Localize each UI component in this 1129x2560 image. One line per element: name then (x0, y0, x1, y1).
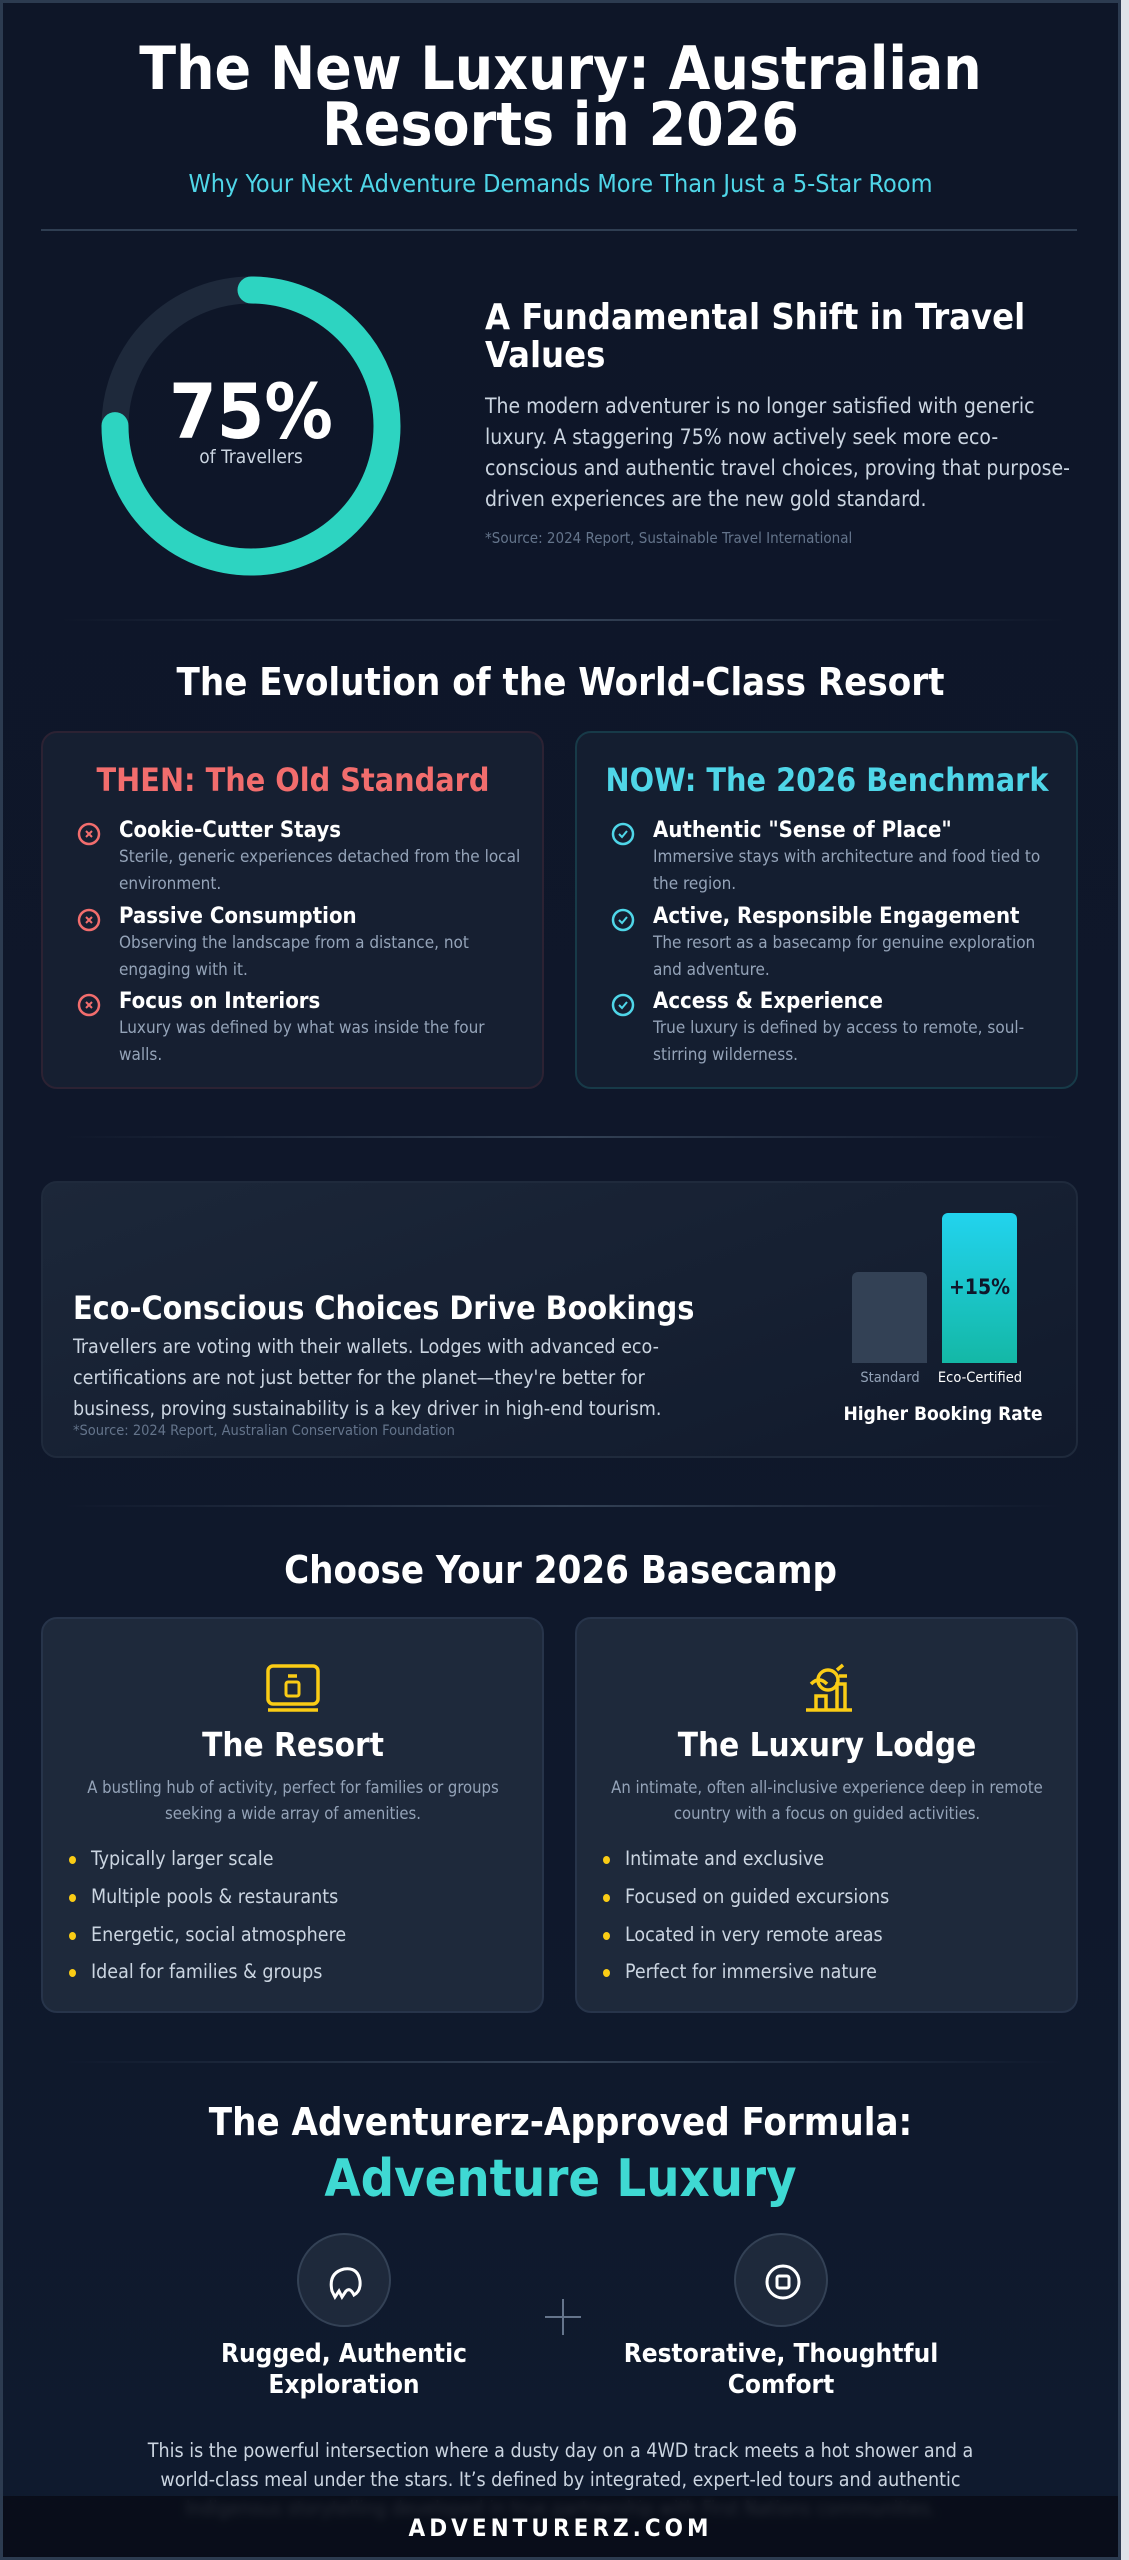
item: sense of place (612, 818, 1040, 894)
item: passive: Observing the landscape from a distance, not (119, 933, 469, 953)
subtitle: Why Your Next Adventure Demands More Than Just a 5-Star Room (188, 169, 932, 198)
panel: now: NOW: The 2026 Benchmark (606, 761, 1048, 799)
donut chart 75%: of Travellers (199, 446, 303, 468)
shift text block: luxury. A staggering 75% now actively seek more eco- (485, 425, 998, 449)
item: interiors (78, 989, 485, 1065)
list: resort features: Typically larger scale (91, 1847, 274, 1870)
icon: comfort (734, 2233, 828, 2327)
item: access: Access & Experience (653, 989, 883, 1014)
item: access (612, 989, 1024, 1065)
item: passive: Passive Consumption (119, 904, 357, 929)
eco paragraph (72, 1335, 661, 1420)
shift text block (484, 297, 1070, 547)
list: resort features: Energetic, social atmosphere (91, 1923, 346, 1946)
label: exploration (221, 2339, 467, 2400)
shift text block: conscious and authentic travel choices, proving that purpose- (485, 456, 1070, 480)
panel: eco bookings (41, 1181, 1078, 1458)
item: interiors: Luxury was defined by what was inside the four (119, 1018, 485, 1038)
item: sense of place: Authentic "Sense of Place" (653, 818, 952, 843)
heading: formula: The Adventurerz-Approved Formula: (209, 2100, 912, 2144)
item: interiors: walls. (119, 1045, 162, 1065)
panel: eco bookings: *Source: 2024 Report, Australian Conservation Foundation (73, 1423, 455, 1439)
panel: the resort: The Resort (202, 1725, 384, 1764)
panel: luxury lodge: The Luxury Lodge (678, 1725, 976, 1764)
item: cookie-cutter: Sterile, generic experiences detached from the local (119, 847, 520, 867)
item: access: stirring wilderness. (653, 1045, 798, 1065)
panel: now (575, 731, 1078, 1089)
item: interiors: Focus on Interiors (119, 989, 320, 1014)
list: lodge features: Focused on guided excursions (625, 1885, 889, 1908)
item: passive: engaging with it. (119, 960, 248, 980)
label: exploration: Exploration (268, 2370, 420, 2400)
bar chart: +15% (949, 1275, 1010, 1299)
heading: evolution: The Evolution of the World-Class Resort (177, 660, 944, 704)
closing paragraph (148, 2439, 973, 2520)
title: Resorts in 2026 (322, 90, 799, 160)
list: lodge features: Located in very remote areas (625, 1923, 883, 1946)
label: comfort: Comfort (728, 2370, 834, 2400)
item: cookie-cutter (78, 818, 520, 894)
list: resort features: Multiple pools & restaurants (91, 1885, 338, 1908)
footer (3, 2496, 1118, 2560)
eco paragraph: Travellers are voting with their wallets. Lodges with advanced eco- (73, 1335, 659, 1358)
eco heading: Eco-Conscious Choices Drive Bookings (73, 1289, 694, 1327)
panel: luxury lodge: An intimate, often all-inclusive experience deep in remote (611, 1778, 1043, 1797)
label: comfort (624, 2339, 938, 2400)
panel: then (41, 731, 544, 1089)
panel: the resort: seeking a wide array of amenities. (165, 1804, 421, 1823)
item: engagement (612, 904, 1035, 980)
bar chart: Higher Booking Rate (843, 1403, 1043, 1425)
title: The New Luxury: Australian (139, 34, 982, 104)
shift text block: A Fundamental Shift in Travel (485, 297, 1025, 338)
heading: basecamp: Choose Your 2026 Basecamp (284, 1548, 837, 1592)
icon: exploration (297, 2233, 391, 2327)
item: engagement: The resort as a basecamp for genuine exploration (653, 933, 1035, 953)
panel: luxury lodge (575, 1617, 1078, 2013)
shift text block: The modern adventurer is no longer satisfied with generic (485, 394, 1034, 418)
list: resort features (69, 1847, 346, 1983)
heading: adventure luxury: Adventure Luxury (324, 2149, 797, 2209)
item: sense of place: the region. (653, 874, 736, 894)
list: lodge features: Perfect for immersive nature (625, 1960, 877, 1983)
label: exploration: Rugged, Authentic (221, 2339, 467, 2369)
item: cookie-cutter: environment. (119, 874, 221, 894)
closing paragraph: Indigenous storytelling developed in true partnership with First Nations communities. (185, 2497, 936, 2520)
footer: ADVENTURERZ.COM (408, 2514, 712, 2542)
list: lodge features (603, 1847, 889, 1983)
title (139, 34, 982, 160)
panel: the resort: A bustling hub of activity, perfect for families or groups (87, 1778, 499, 1797)
icon: plus (545, 2299, 581, 2335)
shift text block: *Source: 2024 Report, Sustainable Travel International (485, 529, 852, 547)
eco paragraph: certifications are not just better for the planet—they're better for (73, 1366, 645, 1389)
donut chart 75% (102, 276, 400, 576)
closing paragraph: This is the powerful intersection where a dusty day on a 4WD track meets a hot shower and a (148, 2439, 973, 2462)
item: engagement: and adventure. (653, 960, 770, 980)
list: lodge features: Intimate and exclusive (625, 1847, 824, 1870)
icon: lodge (806, 1664, 852, 1712)
item: access: True luxury is defined by access to remote, soul- (653, 1018, 1024, 1038)
bar chart (843, 1213, 1043, 1425)
panel: then: THEN: The Old Standard (97, 761, 489, 799)
bar chart: Standard (860, 1370, 920, 1386)
closing paragraph: world-class meal under the stars. It’s defined by integrated, expert-led tours and authentic (160, 2468, 961, 2491)
item: cookie-cutter: Cookie-Cutter Stays (119, 818, 341, 843)
eco paragraph: business, proving sustainability is a key driver in high-end tourism. (73, 1397, 661, 1420)
icon: resort (266, 1664, 320, 1712)
item: sense of place: Immersive stays with architecture and food tied to (653, 847, 1040, 867)
shift text block: driven experiences are the new gold standard. (485, 487, 926, 511)
bar chart: Eco-Certified (938, 1370, 1022, 1386)
panel: the resort (41, 1617, 544, 2013)
panel: luxury lodge: country with a focus on guided activities. (674, 1804, 980, 1823)
shift text block: Values (485, 335, 605, 376)
item: passive (78, 904, 469, 980)
list: resort features: Ideal for families & groups (91, 1960, 322, 1983)
item: engagement: Active, Responsible Engagement (653, 904, 1020, 929)
stat: 75% (169, 367, 333, 456)
label: comfort: Restorative, Thoughtful (624, 2339, 938, 2369)
